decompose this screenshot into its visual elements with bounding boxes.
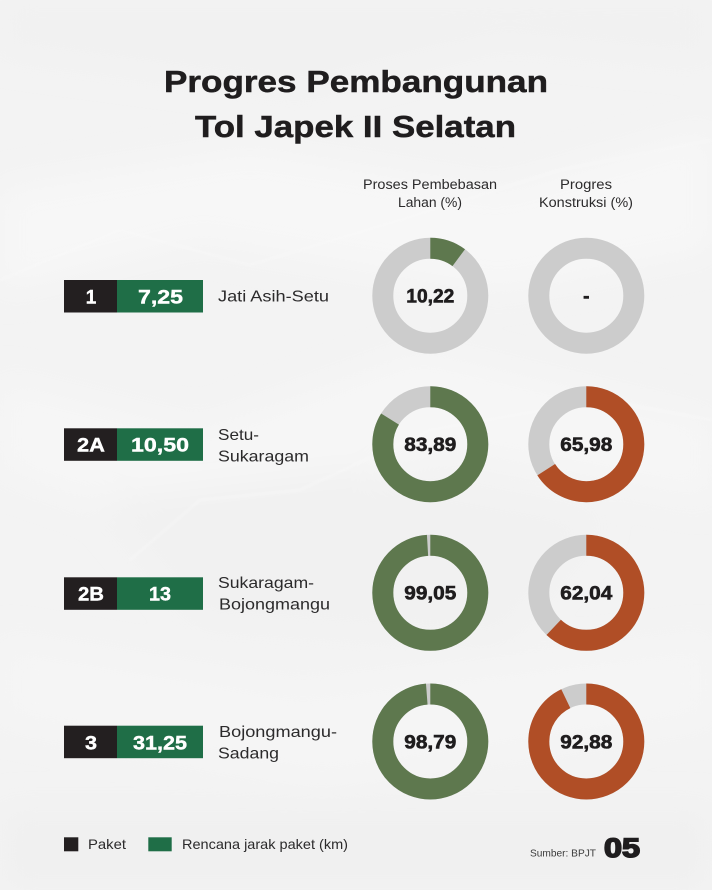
column heading: construction progress: Konstruksi (%) bbox=[539, 195, 633, 210]
column heading: land acquisition: Proses Pembebasan bbox=[363, 177, 497, 192]
row 3: section name bbox=[218, 724, 337, 762]
row 3: construction donut 92,88: 92,88 bbox=[560, 732, 612, 753]
column heading: land acquisition bbox=[363, 177, 497, 210]
row 2A: package badge: 2A bbox=[77, 436, 105, 457]
row 1: construction donut empty: - bbox=[583, 286, 589, 308]
row 2B: package badge: 13 bbox=[149, 584, 171, 606]
legend bbox=[64, 836, 348, 852]
page number: 05 bbox=[604, 833, 640, 863]
row 2A: section name bbox=[218, 427, 309, 466]
row 3: section name: Sadang bbox=[218, 746, 279, 762]
legend: Rencana jarak paket (km) bbox=[182, 836, 348, 852]
column heading: construction progress bbox=[539, 177, 633, 210]
source note: Sumber: BPJT bbox=[530, 848, 597, 860]
row 2A: package badge: 10,50 bbox=[131, 436, 189, 457]
row 2B: package badge bbox=[64, 577, 203, 610]
column heading: construction progress: Progres bbox=[560, 177, 612, 192]
row 1: land donut 10,22: 10,22 bbox=[406, 286, 454, 308]
row 2B: section name: Bojongmangu bbox=[219, 596, 330, 613]
row 3: package badge: 31,25 bbox=[133, 733, 187, 754]
row 2A: land donut 83,89 bbox=[383, 397, 478, 492]
title: Progres Pembangunan bbox=[164, 64, 548, 99]
row 2A: section name: Setu- bbox=[218, 427, 259, 444]
row 2A: section name: Sukaragam bbox=[218, 448, 309, 466]
title: Tol Japek II Selatan bbox=[195, 109, 516, 144]
row 2B: construction donut 62,04: 62,04 bbox=[560, 584, 613, 605]
row 3: section name: Bojongmangu- bbox=[219, 724, 337, 741]
row 1: section name: Jati Asih-Setu bbox=[218, 289, 329, 306]
row 3: package badge bbox=[64, 726, 203, 758]
row 1: package badge: 7,25 bbox=[138, 287, 184, 308]
row 2B: land donut 99,05: 99,05 bbox=[404, 584, 457, 605]
row 2B: construction donut 62,04 bbox=[539, 545, 634, 640]
row 3: package badge: 3 bbox=[85, 733, 97, 754]
row 2A: construction donut 65,98: 65,98 bbox=[560, 435, 612, 456]
row 2B: package badge: 2B bbox=[78, 584, 104, 606]
row 2B: land donut 99,05 bbox=[383, 545, 478, 640]
row 2A: land donut 83,89: 83,89 bbox=[404, 435, 456, 456]
row 1: construction donut empty bbox=[539, 248, 634, 343]
row 3: land donut 98,79: 98,79 bbox=[404, 732, 456, 753]
row 2B: section name bbox=[218, 575, 330, 613]
row 1: land donut 10,22 bbox=[383, 248, 478, 343]
row 2B: section name: Sukaragam- bbox=[218, 575, 314, 592]
row 3: land donut 98,79 bbox=[383, 694, 478, 789]
row 2A: package badge bbox=[64, 428, 203, 461]
row 3: construction donut 92,88 bbox=[539, 694, 634, 789]
title bbox=[164, 64, 548, 144]
row 2A: construction donut 65,98 bbox=[539, 397, 634, 492]
row 1: package badge: 1 bbox=[86, 287, 97, 308]
column heading: land acquisition: Lahan (%) bbox=[398, 195, 462, 210]
legend: Paket bbox=[88, 836, 126, 852]
row 1: package badge bbox=[64, 280, 203, 312]
